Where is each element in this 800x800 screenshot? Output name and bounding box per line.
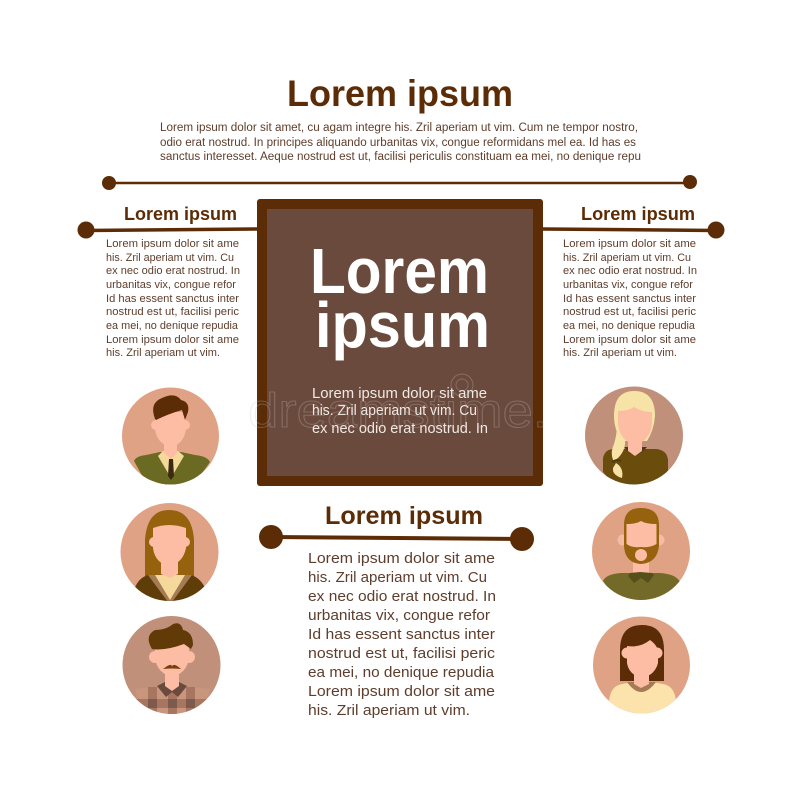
panel heading xyxy=(310,235,490,361)
panel text: his. Zril aperiam ut vim. Cu xyxy=(312,403,477,419)
panel text: ex nec odio erat nostrud. In xyxy=(312,421,488,437)
panel text: Lorem ipsum dolor sit ame xyxy=(312,386,487,402)
intro text block: Lorem ipsum dolor sit amet, cu agam integre his. Zril aperiam ut vim. Cum ne tempor nostro, xyxy=(160,122,638,134)
left text block: ex nec odio erat nostrud. In xyxy=(106,265,240,277)
bottom connector line xyxy=(259,525,534,551)
right text block: Lorem ipsum dolor sit ame xyxy=(563,238,696,250)
left text block: Lorem ipsum dolor sit ame xyxy=(106,238,239,250)
right heading: Lorem ipsum xyxy=(581,204,695,224)
bottom heading: Lorem ipsum xyxy=(325,502,483,530)
right text block xyxy=(563,238,697,359)
icon: man with moustache xyxy=(122,616,220,716)
icon: bearded man xyxy=(592,502,690,606)
right connector line xyxy=(543,222,724,238)
panel heading: ipsum xyxy=(315,289,490,361)
bottom text block: Lorem ipsum dolor sit ame xyxy=(308,550,495,567)
left text block: nostrud est ut, facilisi peric xyxy=(106,306,239,318)
intro text block xyxy=(160,122,641,163)
right text block: his. Zril aperiam ut vim. Cu xyxy=(563,252,691,264)
left text block: his. Zril aperiam ut vim. xyxy=(106,347,220,359)
left connector line xyxy=(78,222,258,238)
intro text block: odio erat nostrud. In principes aliquando urbanitas vix, congue reformidans mel ea. Id has es xyxy=(160,137,636,149)
icon: woman with dark bob xyxy=(593,616,690,718)
left heading: Lorem ipsum xyxy=(124,204,237,224)
left text block xyxy=(106,238,240,359)
bottom text block: his. Zril aperiam ut vim. Cu xyxy=(308,569,487,586)
left text block: Lorem ipsum dolor sit ame xyxy=(106,334,239,346)
right text block: Lorem ipsum dolor sit ame xyxy=(563,334,696,346)
bottom text block: ex nec odio erat nostrud. In xyxy=(308,588,496,605)
bottom text block: urbanitas vix, congue refor xyxy=(308,607,490,624)
left text block: his. Zril aperiam ut vim. Cu xyxy=(106,252,234,264)
panel: central square xyxy=(257,199,543,486)
right text block: ex nec odio erat nostrud. In xyxy=(563,265,697,277)
bottom text block: ea mei, no denique repudia xyxy=(308,664,495,681)
icon: woman with long hair xyxy=(120,503,218,606)
left text block: ea mei, no denique repudia xyxy=(106,320,239,332)
bottom text block: nostrud est ut, facilisi peric xyxy=(308,645,496,662)
panel heading: Lorem xyxy=(310,235,489,307)
right text block: Id has essent sanctus inter xyxy=(563,293,696,305)
watermark: dreamstime. xyxy=(248,385,548,438)
right text block: ea mei, no denique repudia xyxy=(563,320,696,332)
bottom text block: his. Zril aperiam ut vim. xyxy=(308,702,470,719)
title: Lorem ipsum xyxy=(287,73,513,114)
icon: man with tie xyxy=(122,388,219,490)
left text block: urbanitas vix, congue refor xyxy=(106,279,236,291)
intro text block: sanctus interesset. Aeque nostrud est ut, facilisi periculis constituam ea mei, no denique repu xyxy=(160,151,641,163)
top connector line xyxy=(102,175,697,190)
bottom text block: Id has essent sanctus inter xyxy=(308,626,495,643)
right text block: urbanitas vix, congue refor xyxy=(563,279,693,291)
bottom text block: Lorem ipsum dolor sit ame xyxy=(308,683,495,700)
icon: blonde woman with braid xyxy=(585,386,683,490)
right text block: his. Zril aperiam ut vim. xyxy=(563,347,677,359)
left text block: Id has essent sanctus inter xyxy=(106,293,239,305)
panel text xyxy=(312,386,488,437)
right text block: nostrud est ut, facilisi peric xyxy=(563,306,696,318)
bottom text block xyxy=(308,550,496,719)
